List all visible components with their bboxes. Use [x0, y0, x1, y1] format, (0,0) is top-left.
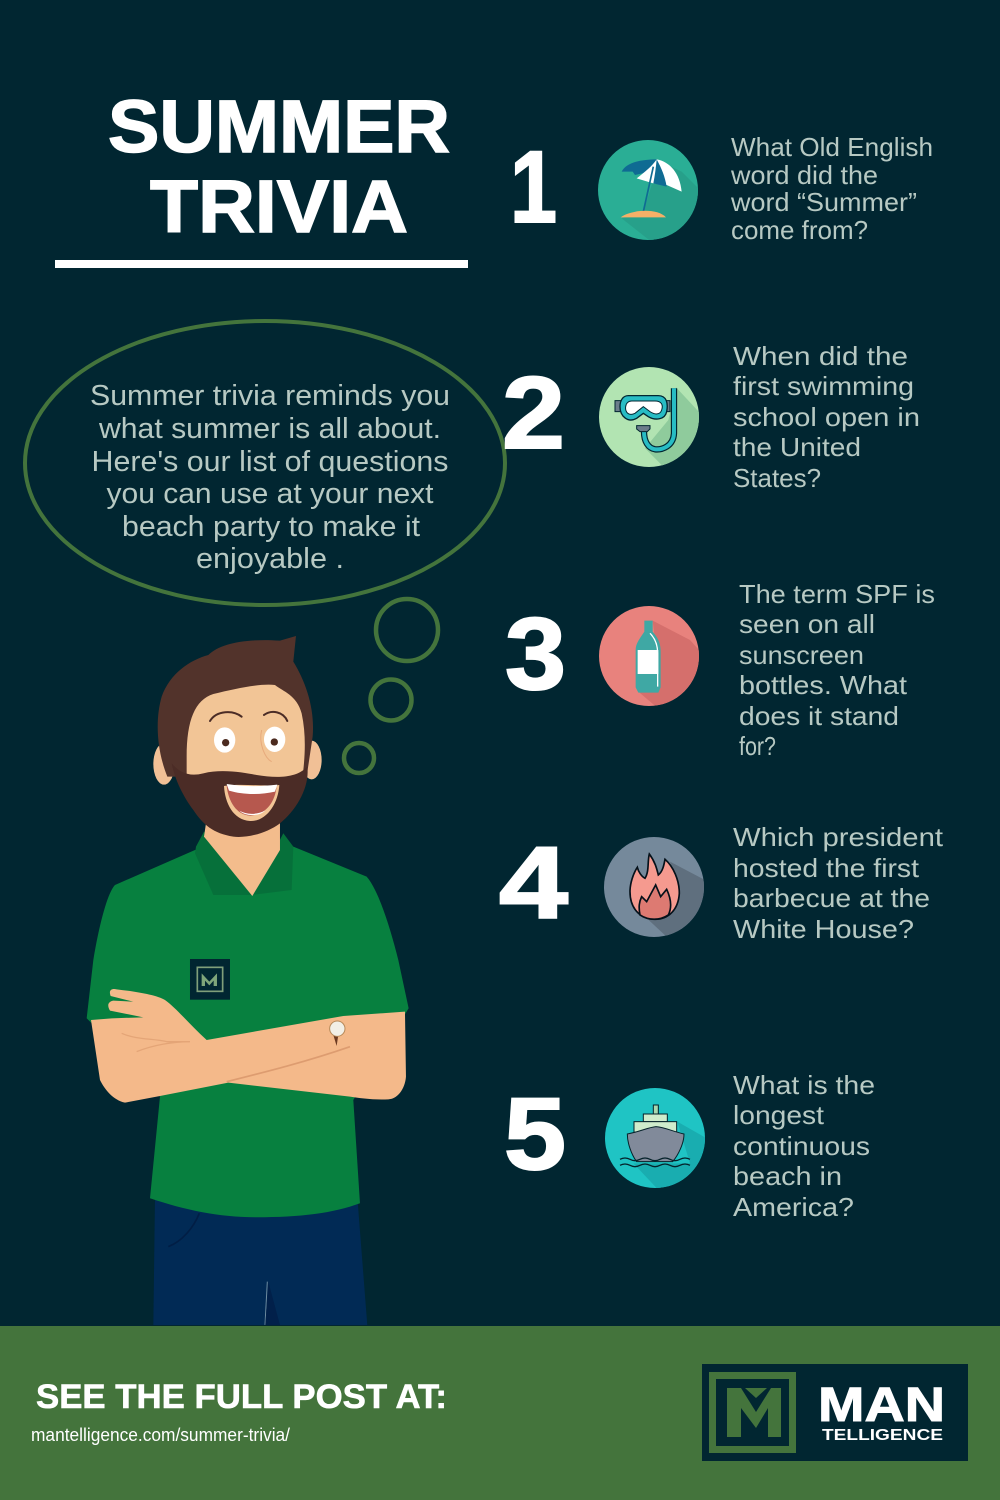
wristwatch: [330, 1021, 345, 1046]
crossed arms: [91, 989, 406, 1103]
question 5 text: beach in: [733, 1161, 842, 1191]
question 2 text: States?: [733, 463, 821, 493]
logo: [702, 1364, 968, 1461]
question 5: [504, 1070, 875, 1222]
question 4: [499, 822, 944, 944]
question 5 text: What is the: [733, 1070, 875, 1100]
question 2 text: [733, 341, 920, 493]
icon: flame: [604, 837, 707, 940]
question 1 text: word did the: [730, 160, 878, 190]
question 4 text: [733, 822, 944, 944]
bubble text: enjoyable .: [196, 543, 344, 575]
hair: [158, 636, 313, 777]
question 3 text: seen on all: [739, 609, 875, 639]
question 3: [505, 579, 935, 761]
question 1: [514, 137, 932, 240]
question 5 text: [733, 1070, 875, 1222]
question 3 text: The term SPF is: [739, 579, 935, 609]
question 1 text: [730, 132, 933, 245]
speech bubble: [25, 321, 505, 605]
question 5 text: America?: [733, 1192, 854, 1222]
head: [153, 636, 322, 837]
number 4: 4: [499, 826, 568, 940]
shirt badge: [190, 959, 230, 1000]
question 2 text: the United: [733, 432, 861, 462]
question 4 text: White House?: [733, 914, 914, 944]
title: TRIVIA: [150, 165, 408, 248]
question 1 text: What Old English: [731, 132, 933, 162]
question 2 text: When did the: [733, 341, 908, 371]
footer: [0, 1326, 1000, 1500]
mouth: [224, 785, 279, 821]
bubble text: Here's our list of questions: [92, 446, 448, 478]
number 1: 1: [510, 130, 557, 244]
icon: sunscreen bottle: [599, 606, 705, 710]
shirt: [87, 832, 409, 1217]
footer heading: SEE THE FULL POST AT:: [36, 1378, 447, 1416]
number 3: 3: [505, 597, 566, 711]
question 2 text: school open in: [733, 402, 920, 432]
bubble text: you can use at your next: [106, 478, 434, 510]
question 3 text: for?: [739, 731, 776, 761]
question 1 text: word “Summer”: [730, 187, 917, 217]
ears: [153, 741, 322, 785]
question 4 text: hosted the first: [733, 853, 920, 883]
number 2: 2: [502, 356, 565, 470]
face: [187, 685, 305, 783]
question 3 text: sunscreen: [739, 640, 864, 670]
collar: [195, 832, 293, 895]
number 5: 5: [504, 1077, 566, 1191]
question 4 text: Which president: [733, 822, 944, 852]
eyes: [214, 727, 285, 753]
icon: beach umbrella: [598, 140, 703, 243]
bubble text: what summer is all about.: [98, 413, 441, 445]
question 2 text: first swimming: [733, 371, 914, 401]
title: SUMMER: [108, 85, 450, 168]
question 5 text: continuous: [733, 1131, 870, 1161]
icon: snorkel mask: [599, 367, 703, 470]
logo wordmark: TELLIGENCE: [822, 1427, 943, 1444]
question 1 text: come from?: [731, 215, 868, 245]
eyebrows: [210, 712, 287, 721]
question 3 text: does it stand: [739, 701, 899, 731]
question 3 text: bottles. What: [739, 670, 908, 700]
bubble text: beach party to make it: [122, 511, 420, 543]
question 4 text: barbecue at the: [733, 883, 930, 913]
logo mark: [727, 1388, 781, 1437]
pants: [153, 1197, 367, 1325]
title underline: [55, 260, 468, 268]
question 3 text: [739, 579, 935, 761]
question 2: [502, 341, 920, 493]
neck: [204, 820, 280, 896]
title: [108, 85, 450, 248]
footer url: mantelligence.com/summer-trivia/: [31, 1425, 290, 1445]
question 5 text: longest: [733, 1100, 825, 1130]
bubble text: [90, 380, 450, 575]
bubble text: Summer trivia reminds you: [90, 380, 450, 412]
logo wordmark: MAN: [818, 1379, 945, 1432]
thought bubbles: [344, 599, 438, 773]
beard: [172, 763, 308, 837]
icon: ship: [605, 1088, 707, 1193]
man illustration: [87, 636, 409, 1325]
